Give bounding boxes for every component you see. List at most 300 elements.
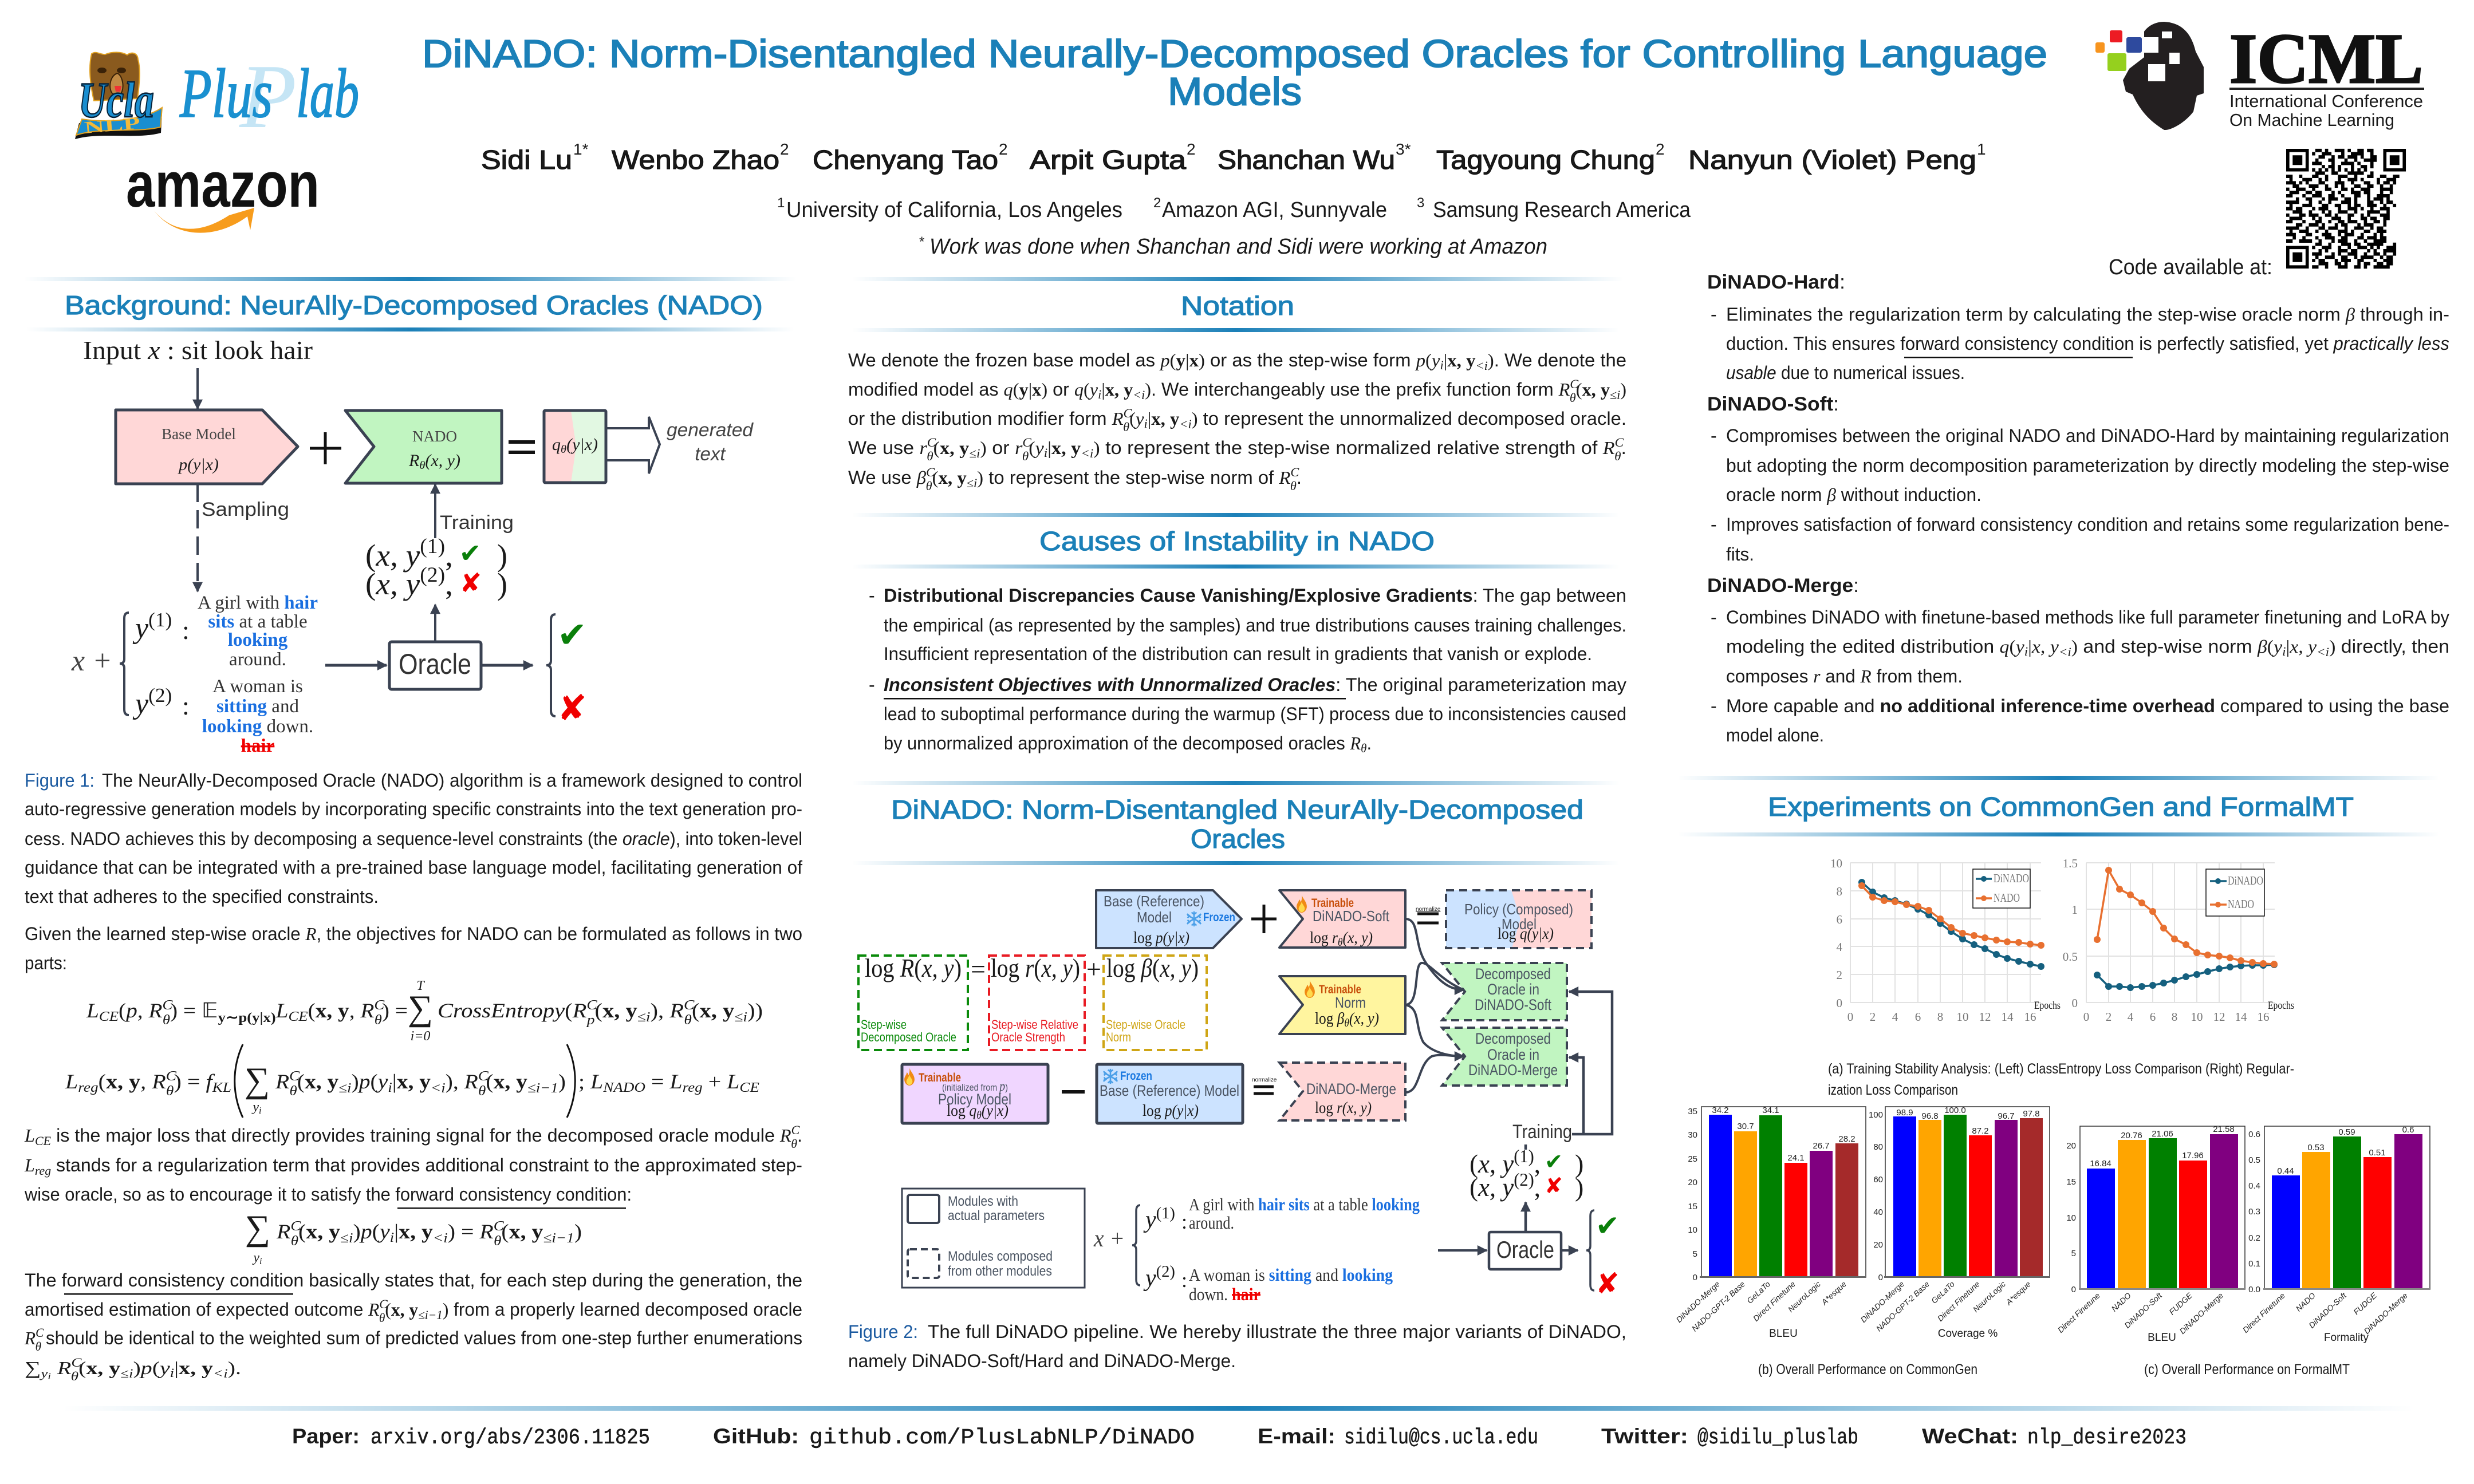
- frozen base model: [1097, 1064, 1243, 1123]
- DiNADO-Hard: DiNADO-Hard:: [1707, 271, 1845, 293]
- forward consistency explanation: x, y: [179, 1357, 213, 1378]
- equation: forward consistency: ≤i−1: [543, 1230, 574, 1246]
- section divider rules: [23, 277, 2440, 1411]
- authors: 2: [780, 140, 789, 158]
- equation: forward consistency: p(y: [361, 1220, 389, 1243]
- notation text: i: [1098, 388, 1101, 401]
- base model block: p(y|x): [178, 455, 219, 474]
- forward consistency explanation: R: [24, 1328, 36, 1348]
- forward consistency explanation: should be identical to the weighted sum of predicted values from one-step further enumerations: [46, 1328, 802, 1348]
- cause 2: θ: [1361, 741, 1367, 755]
- notation text: [848, 350, 1626, 493]
- bar chart: CommonGen BLEU: GeLaTo: [1745, 1279, 1772, 1305]
- affiliations: 3: [1417, 195, 1424, 211]
- training tuples: ): [497, 567, 507, 601]
- panel: experiments: [1674, 792, 2430, 1378]
- log r box: log r(x, y): [991, 953, 1080, 982]
- base reference model: Frozen: [1203, 911, 1235, 924]
- notation text: (: [1129, 408, 1136, 429]
- figure 1 caption: auto-regressive generation models by incorporating specific constraints into the text generation pro-: [25, 799, 802, 819]
- notation text: θ: [1570, 391, 1576, 405]
- bar chart: FormalMT Formality: Direct Finetune: [2241, 1290, 2287, 1335]
- training tuples: ,: [1534, 1149, 1541, 1178]
- x plus samples: around.: [1189, 1213, 1234, 1233]
- arrows: composition: [1405, 919, 1464, 1092]
- logo: ICML: ICML: [2229, 19, 2423, 98]
- training tuples: (2): [1514, 1170, 1534, 1190]
- DiNADO-Soft: oracle norm β without induction.: [1726, 484, 1981, 505]
- cause 2: -: [869, 674, 875, 695]
- bar chart: FormalMT BLEU: 16.84: [2090, 1159, 2111, 1169]
- caption (a): ization Loss Comparison: [1828, 1082, 1958, 1098]
- explanation of losses: L: [24, 1125, 35, 1146]
- line chart: regularization loss: 10: [2191, 1010, 2203, 1024]
- equation: L_reg: ≤i−1: [527, 1080, 558, 1096]
- explanation of losses: wise oracle, so as to encourage it to satisfy the forward consistency condition:: [24, 1184, 632, 1205]
- decomposed oracle soft: Decomposed: [1475, 965, 1551, 982]
- figure 1 caption: Figure 1:: [25, 770, 94, 791]
- notation text: x, y: [1151, 408, 1179, 429]
- legend: Modules composed: [948, 1249, 1053, 1264]
- bar chart: CommonGen BLEU: 5: [1693, 1249, 1697, 1259]
- equation: L_CE: C: [684, 997, 695, 1013]
- frozen base model: Frozen: [1120, 1069, 1152, 1083]
- DiNADO-Merge: i: [2282, 645, 2286, 658]
- normalize equals 2: [1252, 1077, 1277, 1094]
- notation text: C: [1022, 436, 1031, 449]
- line chart: regularization loss: 1: [2072, 903, 2078, 917]
- DiNADO-Merge: ): [2329, 636, 2335, 657]
- forward consistency explanation: (: [78, 1357, 86, 1378]
- minus: [1062, 1090, 1085, 1094]
- x plus samples: :: [1181, 1210, 1187, 1233]
- explanation of losses: R: [779, 1125, 791, 1146]
- bar chart: CommonGen Coverage: NADO-GPT-2 Base: [1874, 1279, 1931, 1333]
- bar chart: FormalMT BLEU: DiNADO-Soft: [2122, 1290, 2164, 1330]
- panel: background NADO: [24, 290, 802, 1383]
- DiNADO-Merge: and step-wise norm β(y: [2083, 636, 2282, 657]
- training tuples: ): [1575, 1149, 1583, 1178]
- equation: L_CE: (: [308, 999, 316, 1022]
- DiNADO-Soft: (x, y): [1343, 929, 1373, 947]
- cause 1: Insufficient representation of the distribution can result in gradients that vanish or explode.: [884, 644, 1592, 664]
- notation text: y: [1134, 408, 1144, 429]
- equation: L_reg: C: [166, 1068, 177, 1084]
- poster header: [75, 19, 2424, 279]
- DiNADO-Merge: directly, then: [2341, 636, 2443, 657]
- figure 1 caption: text that adheres to the specified constraints.: [25, 886, 379, 907]
- notation text: (: [933, 437, 940, 458]
- bar chart: FormalMT Formality: Formality: [2324, 1332, 2369, 1344]
- cause 2: Inconsistent Objectives with Unnormalized Oracles : The original parameterization may: [884, 674, 1626, 695]
- y1 sample: sits at a table: [208, 611, 308, 632]
- arrow: input to base model: [196, 368, 199, 409]
- equation: forward consistency: C: [494, 1218, 505, 1234]
- log r box: Oracle Strength: [991, 1030, 1065, 1044]
- notation text: (: [1576, 379, 1582, 400]
- bar chart: FormalMT BLEU: 15: [2066, 1177, 2076, 1187]
- equation: forward consistency: ≤i: [340, 1230, 353, 1246]
- base reference model: Base (Reference): [1104, 893, 1204, 910]
- line chart: regularization loss: NADO: [2228, 897, 2254, 911]
- DiNADO-Merge block: [1279, 1063, 1405, 1120]
- figure 1 caption: The NeurAlly-Decomposed Oracle (NADO) algorithm is a framework designed to control: [102, 770, 802, 791]
- training tuples: ,: [445, 567, 453, 601]
- authors: Arpit Gupta: [1030, 145, 1186, 175]
- equation: L_CE: x, y: [602, 999, 637, 1022]
- DiNADO-Merge: modeling the edited distribution q(y: [1726, 636, 2024, 657]
- footer contact bar: GitHub:: [713, 1424, 799, 1448]
- authors: Nanyun (Violet) Peng: [1688, 145, 1976, 175]
- base reference model: [1096, 890, 1242, 948]
- equation: forward consistency: <i: [433, 1230, 448, 1246]
- oracle box: Oracle: [399, 648, 471, 680]
- cause 2: [869, 674, 1626, 755]
- legend: [902, 1189, 1085, 1288]
- DiNADO-Hard: -: [1711, 304, 1717, 325]
- forward consistency explanation: x, y: [86, 1357, 120, 1378]
- notation text: to represent the unnormalized decomposed oracle.: [1203, 408, 1617, 429]
- line chart: regularization loss: DiNADO: [2228, 874, 2263, 887]
- bar chart: CommonGen BLEU: [1674, 1106, 1866, 1340]
- decomposed oracle merge: Oracle in: [1487, 1046, 1539, 1063]
- notation text: ): [1145, 379, 1151, 400]
- line chart: regularization loss: 4: [2128, 1010, 2134, 1024]
- y2 sample: looking down.: [202, 716, 313, 737]
- DiNADO-Soft: Improves satisfaction of forward consistency condition and retains some regularization bene-: [1726, 514, 2449, 535]
- composed policy model: log q(y|x): [1498, 925, 1554, 943]
- arrow: sampling: [196, 484, 199, 591]
- equation: L_CE: (: [594, 999, 602, 1022]
- notation text: (: [932, 467, 939, 488]
- arrow: to oracle: [325, 664, 387, 666]
- log beta box: Step-wise Oracle: [1106, 1017, 1185, 1032]
- plus: [1251, 905, 1277, 933]
- DiNADO-Soft: Trainable: [1311, 897, 1354, 910]
- line chart: class entropy loss: 0: [1847, 1010, 1853, 1024]
- equation: L_CE: (: [692, 999, 699, 1022]
- notation text: We denote the frozen base model as p(y|x) or as the step-wise form p(y: [848, 350, 1440, 370]
- bar chart: FormalMT Formality: 0.4: [2248, 1181, 2260, 1191]
- training tuples: (1): [1514, 1146, 1534, 1166]
- bar chart: CommonGen Coverage: 96.7: [1998, 1111, 2015, 1121]
- figure 1: NADO diagram: [71, 336, 754, 756]
- notation text: . We interchangeably use the prefix function form R: [1151, 379, 1570, 400]
- bar chart: CommonGen BLEU: 30.7: [1737, 1122, 1754, 1131]
- normalize equals: normalize: [1416, 906, 1441, 913]
- cause 2: .: [1366, 733, 1372, 753]
- bar chart: CommonGen Coverage: [1858, 1106, 2050, 1340]
- input text: Input x : sit look hair: [83, 336, 313, 365]
- DiNADO-Merge: x, y: [2031, 636, 2059, 657]
- bar chart: FormalMT BLEU: DiNADO-Merge: [2177, 1290, 2225, 1336]
- training tuples: (1): [420, 534, 445, 558]
- line chart: class entropy loss: 10: [1830, 857, 1842, 870]
- forward consistency explanation: θ: [36, 1340, 41, 1353]
- equation: L_CE: (: [119, 999, 126, 1022]
- bar chart: FormalMT Formality: 0.51: [2369, 1148, 2386, 1158]
- equation: L_reg: +: [703, 1070, 727, 1093]
- equation: L_reg: L: [726, 1070, 739, 1093]
- x plus samples: hair: [1232, 1284, 1260, 1304]
- notation text: to represent the step-wise normalized relative strength of R: [1105, 437, 1614, 458]
- equation: forward consistency: (: [298, 1220, 306, 1243]
- bar chart: FormalMT BLEU: 17.96: [2182, 1151, 2204, 1161]
- decomposed oracle soft: Oracle in: [1487, 981, 1539, 998]
- decomposed oracle merge: Decomposed: [1475, 1030, 1551, 1047]
- equation: forward consistency: R: [276, 1220, 290, 1243]
- training tuples: (x, y: [365, 567, 419, 601]
- trainable policy model: (initialized from p): [942, 1079, 1008, 1094]
- authors: 1*: [573, 140, 589, 158]
- bar chart: FormalMT Formality: NADO: [2294, 1290, 2317, 1313]
- bar chart: FormalMT BLEU: 21.58: [2213, 1124, 2235, 1134]
- bar chart: CommonGen BLEU: 30: [1688, 1130, 1697, 1140]
- y1 sample: :: [182, 615, 190, 645]
- NADO block: NADO: [412, 428, 457, 445]
- notation text: θ: [926, 479, 932, 493]
- DiNADO-Merge: -: [1711, 696, 1717, 716]
- DiNADO-Hard: usable due to numerical issues.: [1726, 362, 1965, 383]
- training tuples: ): [1575, 1173, 1583, 1202]
- line chart: class entropy loss: 4: [1892, 1010, 1898, 1024]
- DiNADO-Merge block: log r(x, y): [1315, 1099, 1372, 1117]
- training tuples: ✔: [1545, 1149, 1563, 1174]
- trainable policy model: [902, 1064, 1048, 1123]
- bar chart: CommonGen BLEU: 26.7: [1813, 1141, 1830, 1151]
- bar chart: FormalMT BLEU: 20: [2066, 1141, 2076, 1151]
- equation: L_CE: ) =: [170, 999, 202, 1022]
- y2 sample: :: [182, 691, 190, 720]
- bar chart: FormalMT Formality: DiNADO-Merge: [2362, 1290, 2409, 1336]
- equation: forward consistency: ∑: [245, 1209, 270, 1248]
- legend: from other modules: [948, 1264, 1052, 1279]
- bar chart: FormalMT BLEU: BLEU: [2148, 1332, 2176, 1344]
- bar chart: CommonGen BLEU: 35: [1688, 1107, 1697, 1116]
- equation: L_reg: i: [259, 1105, 262, 1116]
- line chart: regularization loss: 0: [2072, 996, 2078, 1010]
- QR code: [2286, 149, 2406, 269]
- DiNADO-Merge: DiNADO-Merge :: [1707, 575, 1859, 597]
- equation: L_reg: NADO: [602, 1080, 645, 1095]
- figure 1 caption: cess. NADO achieves this by decomposing a sequence-level constraints (the oracle), into token-level: [25, 828, 802, 849]
- forward consistency explanation: ≤i: [120, 1367, 133, 1380]
- y1 sample: [132, 593, 318, 670]
- equation: L_CE: R: [669, 999, 684, 1022]
- equation: L_reg: x, y, R: [106, 1070, 163, 1093]
- equation: forward consistency: x, y: [306, 1220, 340, 1243]
- x plus samples: A woman is sitting and looking: [1189, 1265, 1393, 1285]
- line chart: regularization loss: [2063, 857, 2294, 1024]
- y2 sample: (2): [148, 684, 172, 707]
- legend: Modules with: [948, 1194, 1018, 1209]
- equation: L_reg: L: [65, 1070, 78, 1093]
- sampling label: Sampling: [202, 499, 289, 520]
- equation: forward consistency: y: [253, 1250, 259, 1265]
- equation: forward consistency: [245, 1209, 582, 1266]
- equation: forward consistency: ): [574, 1220, 582, 1243]
- equation: L_reg: θ: [166, 1083, 174, 1099]
- equation: L_CE: p, R: [124, 999, 162, 1022]
- bar chart: FormalMT BLEU: 20.76: [2121, 1131, 2142, 1140]
- equation: L_reg: reg: [683, 1080, 703, 1095]
- equation: L_reg: θ: [290, 1083, 297, 1099]
- equation: L_CE: θ: [684, 1012, 692, 1028]
- title: DiNADO: Norm-Disentangled Neurally-Decomposed Oracles for Controlling Language: [422, 32, 2047, 76]
- line chart: regularization loss: 12: [2213, 1010, 2225, 1024]
- training tuples: ,: [445, 538, 453, 573]
- logo: amazon: amazon: [126, 149, 320, 220]
- affiliations: 2: [1153, 195, 1161, 211]
- title: Models: [1168, 70, 1302, 113]
- icon: cross: ✘: [1596, 1267, 1620, 1300]
- decomposed oracle merge: DiNADO-Merge: [1468, 1061, 1558, 1079]
- bar chart: FormalMT BLEU: 21.06: [2152, 1129, 2173, 1139]
- notation text: modified model as q(y|x) or q(y: [848, 379, 1098, 400]
- arrow: to oracle: [1438, 1249, 1487, 1252]
- notation text: θ: [927, 449, 933, 463]
- trainable policy model: log q: [947, 1102, 978, 1120]
- x plus samples: x +: [1093, 1226, 1125, 1252]
- line chart: regularization loss: 6: [2150, 1010, 2156, 1024]
- notation text: (: [1029, 437, 1035, 458]
- line chart: class entropy loss: 16: [2024, 1010, 2036, 1024]
- equation: L_reg: <i: [431, 1080, 446, 1096]
- explanation of losses: θ: [791, 1137, 797, 1151]
- caption (c): (c) Overall Performance on FormalMT: [2144, 1361, 2350, 1378]
- notation text: θ: [1290, 479, 1297, 493]
- bar chart: CommonGen BLEU: 34.2: [1712, 1106, 1729, 1115]
- cause 2: by unnormalized approximation of the decomposed oracles R: [884, 733, 1364, 753]
- equation: L_reg: [65, 1044, 759, 1118]
- equation: forward consistency: R: [479, 1220, 494, 1243]
- norm block: Trainable: [1319, 983, 1361, 996]
- DiNADO-Merge: composes r and R from them.: [1726, 666, 1963, 686]
- bar chart: FormalMT BLEU: NADO: [2110, 1290, 2133, 1313]
- bar chart: FormalMT BLEU: Direct Finetune: [2056, 1290, 2102, 1335]
- line chart: regularization loss: 0: [2083, 1010, 2089, 1024]
- notation text: x, y: [1447, 350, 1476, 370]
- footer contact bar: Twitter:: [1601, 1424, 1688, 1448]
- y1 sample: around.: [229, 649, 286, 670]
- bar chart: CommonGen Coverage: 40: [1873, 1207, 1883, 1217]
- heading: background: Background: NeurAlly-Decomposed Oracles (NADO): [65, 290, 763, 320]
- footer contact bar: @sidilu_pluslab: [1697, 1426, 1858, 1450]
- equation: L_reg: ≤i: [338, 1080, 352, 1096]
- line chart: class entropy loss: 12: [1979, 1010, 1991, 1024]
- figure 2 caption: namely DiNADO-Soft/Hard and DiNADO-Merge.: [848, 1351, 1236, 1371]
- forward consistency explanation: i: [170, 1366, 174, 1380]
- authors: Wenbo Zhao: [612, 145, 779, 175]
- notation text: ): [1093, 437, 1100, 458]
- equation: L_CE: C: [162, 997, 173, 1013]
- DiNADO-Soft: DiNADO-Soft :: [1707, 393, 1839, 415]
- equation: L_CE: ≤i: [637, 1009, 651, 1025]
- line chart: regularization loss: 1.5: [2063, 857, 2078, 870]
- equation: L_reg: KL: [212, 1080, 231, 1095]
- line chart: regularization loss: 8: [2172, 1010, 2177, 1024]
- affiliations: 1: [777, 195, 785, 211]
- composed policy model: [1446, 890, 1591, 948]
- notation text: θ: [1123, 420, 1129, 434]
- logo: Plus lab: lab: [296, 55, 359, 132]
- DiNADO-Soft: Compromises between the original NADO and DiNADO-Hard by maintaining regularization: [1726, 425, 2449, 446]
- DiNADO-Hard: Eliminates the regularization term by calculating the step-wise oracle norm β through in-: [1726, 304, 2449, 325]
- bar chart: FormalMT BLEU: 5: [2071, 1249, 2076, 1258]
- training tuples: ,: [1534, 1173, 1541, 1202]
- arrows: training feedback: [1526, 992, 1612, 1232]
- training label: Training: [440, 512, 514, 534]
- authors: Sidi Lu: [481, 145, 572, 175]
- line chart: class entropy loss: 0: [1836, 996, 1842, 1010]
- equation: L_reg: ∑: [245, 1061, 270, 1100]
- forward consistency explanation: y: [40, 1367, 48, 1380]
- equation: L_reg: x, y: [305, 1070, 338, 1093]
- equation: forward consistency: ): [353, 1220, 361, 1243]
- explanation of losses: .: [797, 1125, 802, 1146]
- caption (a): [1828, 1061, 2294, 1098]
- footer contact bar: [292, 1424, 2187, 1450]
- icon: check: ✔: [1596, 1209, 1620, 1242]
- bar chart: CommonGen Coverage: DiNADO-Merge: [1858, 1279, 1906, 1324]
- footer contact bar: github.com/PlusLabNLP/DiNADO: [809, 1426, 1195, 1450]
- equation: L_reg: reg: [78, 1080, 99, 1095]
- x plus samples: down.: [1189, 1284, 1228, 1304]
- decomposed oracle soft: DiNADO-Soft: [1475, 996, 1551, 1013]
- forward consistency explanation: ∑: [25, 1357, 41, 1378]
- equation: L_CE: L: [275, 999, 288, 1022]
- equation: forward consistency: x, y: [509, 1220, 543, 1243]
- x plus samples: A girl with hair sits at a table looking: [1189, 1194, 1420, 1214]
- y1 sample: y: [135, 612, 148, 645]
- caption (a): (a) Training Stability Analysis: (Left) ClassEntropy Loss Comparison (Right) Regular-: [1828, 1061, 2294, 1077]
- bar chart: FormalMT Formality: 0.59: [2338, 1127, 2355, 1137]
- notation text: C: [1124, 406, 1132, 420]
- note on affiliation: *: [919, 234, 924, 250]
- logo: ICML: On Machine Learning: [2229, 110, 2394, 130]
- equation: L_reg: ; L: [578, 1070, 602, 1093]
- norm block: θ: [1344, 1017, 1349, 1029]
- bar chart: FormalMT Formality: 0.44: [2277, 1166, 2294, 1176]
- generated text label: text: [695, 443, 726, 464]
- training tuples: (x, y: [1470, 1149, 1515, 1178]
- logo: UCLA NLP bear: Ucla: [78, 73, 154, 128]
- log beta box: [1104, 953, 1207, 1050]
- note on affiliation: Work was done when Shanchan and Sidi were working at Amazon: [929, 235, 1547, 259]
- line chart: class entropy loss: [1830, 857, 2061, 1024]
- equation: L_reg: L: [669, 1070, 683, 1093]
- figure 2 caption: The full DiNADO pipeline. We hereby illustrate the three major variants of DiNADO,: [928, 1321, 1626, 1342]
- brace output: [546, 614, 556, 716]
- DiNADO-Merge: i: [2024, 645, 2028, 658]
- footer contact bar: WeChat:: [1922, 1424, 2018, 1448]
- log R box: [858, 953, 968, 1050]
- figure 1 caption: [25, 770, 802, 907]
- decomposed oracle merge: [1442, 1028, 1567, 1086]
- notation text: ): [1192, 408, 1198, 429]
- notation text: |: [1148, 408, 1151, 429]
- brace output: [1586, 1210, 1594, 1290]
- cause 1: [869, 585, 1626, 664]
- forward consistency explanation: ): [133, 1357, 141, 1378]
- equation: L_reg: R: [275, 1070, 289, 1093]
- panel: notation: [848, 291, 1626, 493]
- equation: forward consistency: (: [501, 1220, 509, 1243]
- equation: L_CE: i=0: [411, 1029, 430, 1044]
- DiNADO-Merge: ): [2071, 636, 2078, 657]
- line chart: class entropy loss: DiNADO: [1994, 871, 2029, 885]
- forward consistency explanation: θ: [71, 1369, 78, 1383]
